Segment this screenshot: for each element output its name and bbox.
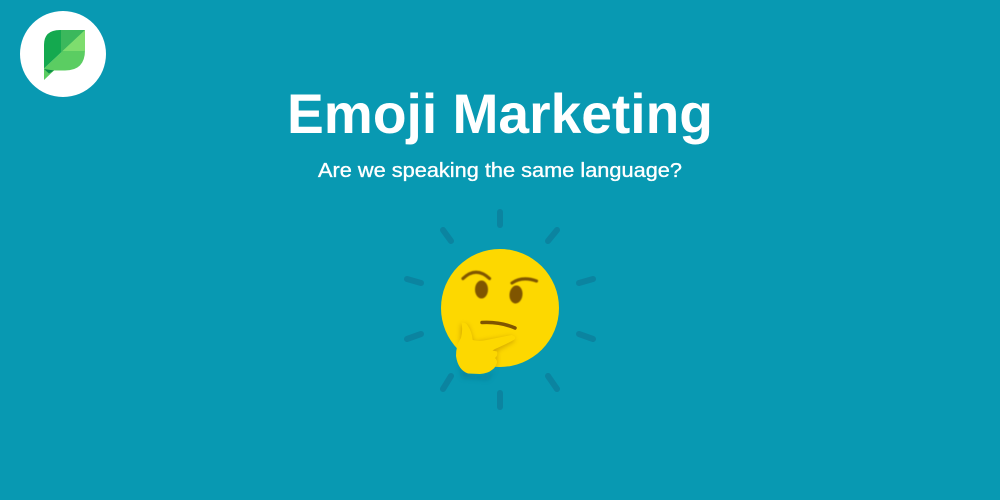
logo: Sprout leaf badge	[20, 11, 106, 97]
eyes and brows	[463, 272, 536, 304]
hand shadow on face	[460, 324, 515, 368]
face	[441, 249, 559, 367]
icon: radiating rays	[407, 212, 593, 407]
title: Emoji Marketing	[287, 82, 713, 145]
hand shadow on background	[458, 360, 497, 380]
mouth	[482, 322, 515, 328]
subtitle: Are we speaking the same language?	[318, 160, 682, 182]
icon: thinking face emoji	[441, 249, 559, 380]
hand	[456, 322, 515, 374]
